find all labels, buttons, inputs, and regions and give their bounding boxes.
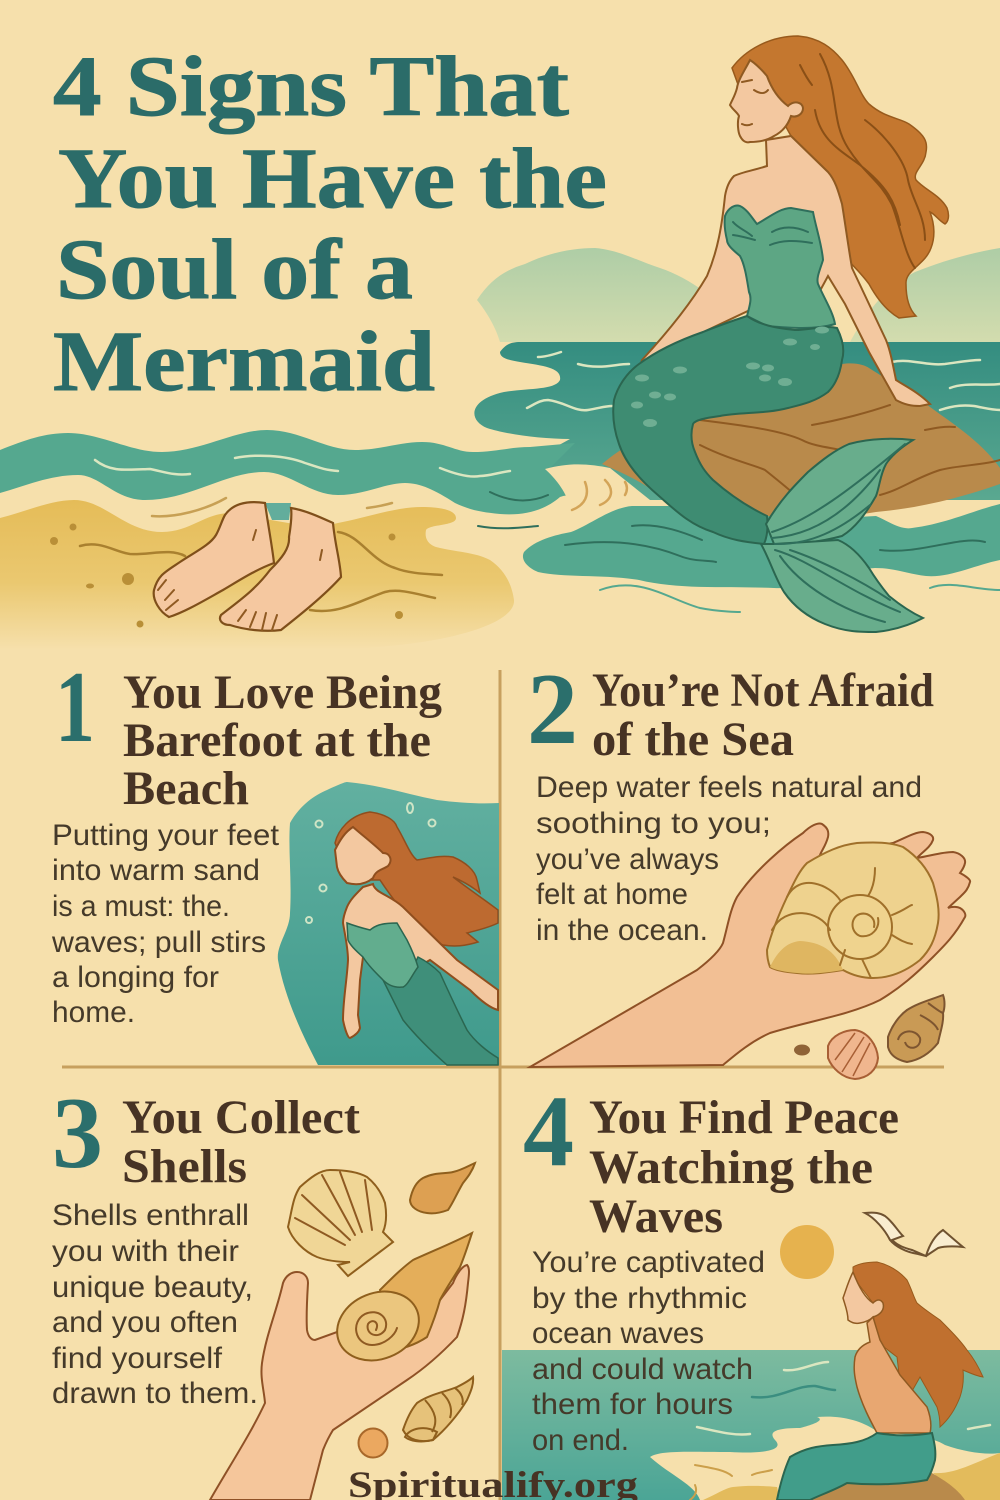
mermaid face bbox=[730, 60, 803, 142]
sign 3 text: and you often bbox=[52, 1306, 238, 1339]
sign 4 heading bbox=[589, 1091, 899, 1243]
sign 4 text: them for hours bbox=[532, 1388, 733, 1421]
sign 3 heading: Shells bbox=[122, 1140, 247, 1193]
panel dividers bbox=[62, 670, 944, 1500]
sign 3 number: 3 bbox=[52, 1077, 103, 1190]
sign 3 text bbox=[52, 1199, 258, 1410]
mermaid tail bbox=[613, 316, 843, 544]
title: 4 Signs That bbox=[53, 38, 569, 134]
sign 4 text: You’re captivated bbox=[532, 1246, 765, 1279]
panel: sign 1 bbox=[51, 651, 499, 1065]
mermaid rock bbox=[602, 363, 1000, 518]
shells and hand illustration bbox=[210, 1163, 475, 1500]
sign 4 text: by the rhythmic bbox=[532, 1282, 747, 1315]
mermaid bodice bbox=[725, 205, 835, 328]
sign 2 text bbox=[536, 771, 922, 947]
sign 2 text: Deep water feels natural and bbox=[536, 771, 922, 804]
mermaid hair bbox=[732, 36, 948, 318]
sign 1 number: 1 bbox=[55, 651, 95, 764]
sign 1 heading: You Love Being bbox=[123, 666, 442, 719]
sign 4 text: on end. bbox=[532, 1424, 629, 1457]
sign 2 text: in the ocean. bbox=[536, 914, 708, 947]
sign 4 heading: Watching the bbox=[589, 1141, 873, 1194]
illustration: sea and shore bbox=[0, 342, 1000, 650]
sign 2 text: soothing to you; bbox=[536, 807, 771, 840]
sign 2 number: 2 bbox=[527, 653, 578, 766]
sign 3 text: you with their bbox=[52, 1235, 239, 1268]
sign 4 text: ocean waves bbox=[532, 1317, 704, 1350]
sign 3 text: unique beauty, bbox=[52, 1271, 253, 1304]
sign 1 text: Putting your feet bbox=[52, 819, 280, 852]
mermaid arms and torso bbox=[640, 136, 930, 406]
title: Mermaid bbox=[53, 313, 435, 409]
sign 4 heading: Waves bbox=[589, 1190, 723, 1243]
sea scene illustration bbox=[502, 1213, 1000, 1500]
sign 1 text bbox=[51, 819, 280, 1029]
sign 4 heading: You Find Peace bbox=[589, 1091, 899, 1144]
sign 1 text: into warm sand bbox=[52, 854, 260, 887]
sign 2 heading: of the Sea bbox=[592, 713, 794, 766]
sign 4 text: and could watch bbox=[532, 1353, 753, 1386]
panel: sign 4 bbox=[502, 1075, 1000, 1500]
illustration: mermaid on rock bbox=[602, 36, 1000, 632]
title: Soul of a bbox=[56, 221, 413, 317]
hand holding shell illustration bbox=[530, 823, 970, 1079]
sign 2 text: you’ve always bbox=[536, 843, 719, 876]
sign 3 text: Shells enthrall bbox=[52, 1199, 249, 1232]
illustration: bare feet bbox=[154, 502, 341, 631]
panel: sign 2 bbox=[527, 653, 970, 1079]
mermaid tail fin bbox=[761, 439, 923, 632]
title: You Have the bbox=[58, 130, 607, 226]
illustration: distant hills bbox=[477, 248, 1000, 342]
sign 1 text: waves; pull stirs bbox=[51, 926, 266, 959]
sign 4 number: 4 bbox=[523, 1075, 574, 1188]
sign 1 text: is a must: the. bbox=[52, 890, 230, 923]
sign 2 heading: You’re Not Afraid bbox=[592, 664, 934, 717]
sign 1 text: home. bbox=[52, 996, 135, 1029]
panel: sign 3 bbox=[52, 1077, 475, 1500]
sign 3 text: find yourself bbox=[52, 1342, 223, 1375]
sign 3 text: drawn to them. bbox=[52, 1377, 258, 1410]
sign 2 heading bbox=[592, 664, 934, 766]
sign 1 heading: Barefoot at the bbox=[123, 714, 431, 767]
sign 1 heading: Beach bbox=[123, 762, 249, 815]
sign 2 text: felt at home bbox=[536, 878, 688, 911]
sign 1 heading bbox=[123, 666, 442, 815]
title bbox=[53, 38, 607, 409]
sign 4 text bbox=[532, 1246, 765, 1457]
sign 3 heading bbox=[122, 1091, 360, 1193]
sign 1 text: a longing for bbox=[52, 961, 219, 994]
sign 1 swimming mermaid illustration bbox=[278, 782, 499, 1065]
sign 3 heading: You Collect bbox=[122, 1091, 360, 1144]
